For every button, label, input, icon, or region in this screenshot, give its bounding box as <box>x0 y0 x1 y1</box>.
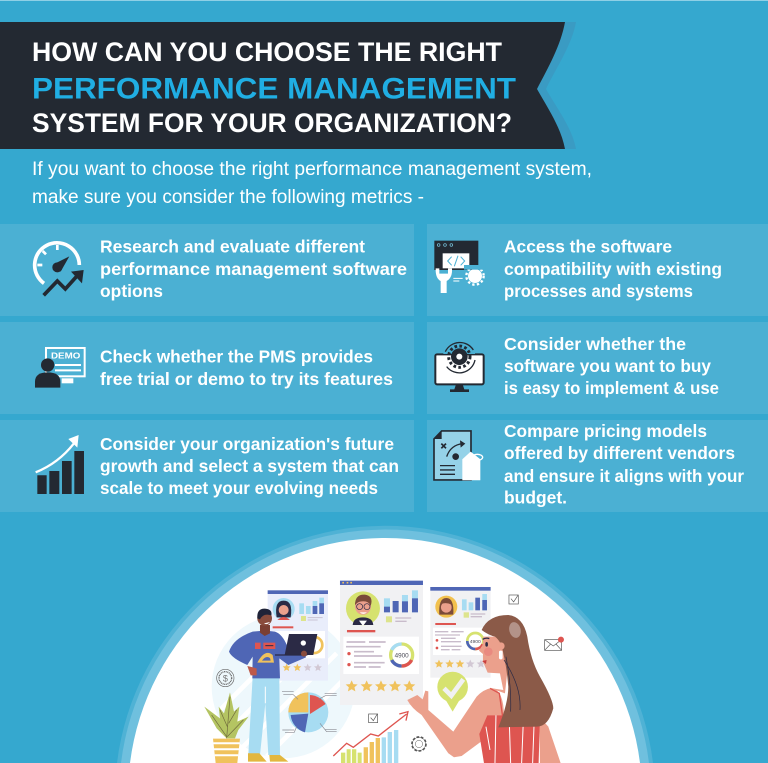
right side elements <box>407 587 564 763</box>
coin icon: $ <box>223 673 228 683</box>
icon: monitor with gear <box>435 343 484 392</box>
striped backdrop <box>212 615 355 758</box>
text: growth and select a system that can <box>100 456 399 476</box>
text: software you want to buy <box>504 356 711 376</box>
check box small top <box>509 595 518 604</box>
intro text <box>32 159 592 208</box>
intro text: make sure you consider the following metrics - <box>32 187 424 208</box>
pie chart <box>282 692 337 732</box>
woman pointing <box>407 615 561 763</box>
icon: gauge with rising arrow <box>35 243 84 295</box>
icon: code window with wrench and gear <box>434 241 486 293</box>
check box small <box>369 714 378 723</box>
text <box>504 334 719 398</box>
text: Consider your organization's future <box>100 434 394 454</box>
text: and ensure it aligns with your <box>504 466 744 486</box>
gear icon <box>412 737 426 751</box>
intro text: If you want to choose the right performance management system, <box>32 159 592 180</box>
text: options <box>100 281 163 301</box>
icon: demo screen with person: DEMO <box>51 351 81 361</box>
text: Research and evaluate different <box>100 237 365 257</box>
text <box>100 347 393 389</box>
panel: software compatibility <box>427 224 768 316</box>
review card right <box>430 587 491 678</box>
text: budget. <box>504 488 567 508</box>
review card center <box>340 581 423 705</box>
panel: easy to implement <box>427 322 768 414</box>
text <box>100 237 407 301</box>
plant in pot <box>204 692 249 763</box>
text: Check whether the PMS provides <box>100 347 373 367</box>
text: Compare pricing models <box>504 421 707 441</box>
title <box>32 37 516 138</box>
icon: growth bars with arrow <box>36 435 84 494</box>
panel: free trial or demo <box>0 322 414 414</box>
text: compatibility with existing <box>504 259 722 279</box>
text: Consider whether the <box>504 334 686 354</box>
text: performance management software <box>100 259 407 279</box>
title: SYSTEM FOR YOUR ORGANIZATION? <box>32 108 512 138</box>
icon: pricing document and tag <box>434 431 483 480</box>
title: HOW CAN YOU CHOOSE THE RIGHT <box>32 37 502 67</box>
green check bubble <box>437 672 468 712</box>
text: offered by different vendors <box>504 443 735 463</box>
text <box>504 237 722 301</box>
text: is easy to implement & use <box>504 378 719 398</box>
white semicircle with rings <box>117 526 653 763</box>
panel: compare pricing <box>427 420 768 512</box>
title banner <box>0 22 576 149</box>
growth bar chart with red line <box>333 712 408 763</box>
text: free trial or demo to try its features <box>100 369 393 389</box>
donut chart 4900: 4900 <box>395 652 409 659</box>
review card right: 4900 <box>470 639 481 645</box>
panel: future growth <box>0 420 414 512</box>
illustration: performance review scene <box>204 581 564 763</box>
text <box>100 434 399 498</box>
icon: demo screen with person <box>35 348 85 388</box>
panel: research software options <box>0 224 414 316</box>
text: Access the software <box>504 237 672 257</box>
envelope with notification <box>545 637 564 650</box>
text <box>504 421 744 508</box>
man with laptop <box>229 609 317 762</box>
coin icon <box>217 669 234 687</box>
review card left <box>268 590 328 681</box>
title: PERFORMANCE MANAGEMENT <box>32 72 516 106</box>
text: scale to meet your evolving needs <box>100 478 378 498</box>
text: processes and systems <box>504 281 693 301</box>
